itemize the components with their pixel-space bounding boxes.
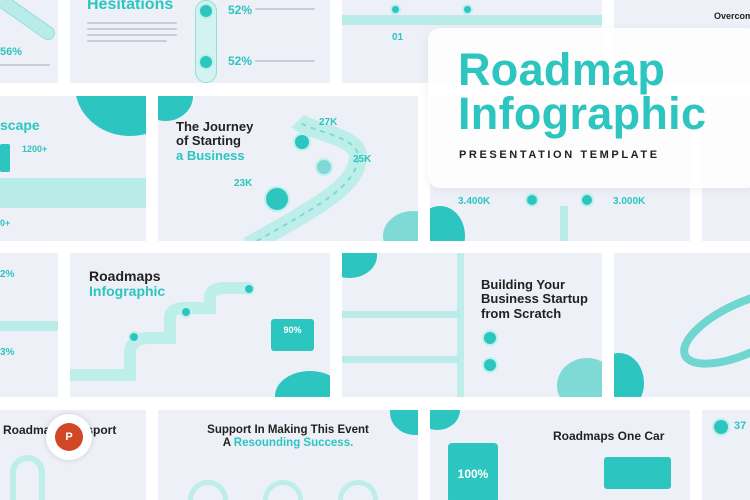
slide: journey: 25K: [353, 154, 371, 165]
slide: row1 col1: [0, 0, 58, 83]
slide: row1 col3: [342, 0, 602, 83]
slide: row4 col4: 37: [734, 420, 746, 432]
slide: hesitations: 52%: [228, 54, 252, 68]
slide: journey: [158, 96, 418, 241]
slide: row3 col1: 2%: [0, 269, 14, 280]
slide: hesitations: [70, 0, 330, 83]
slide: row1 col1: 56%: [0, 46, 22, 58]
slide: roadmaps one car: 100%: [458, 467, 488, 481]
slide: journey: 27K: [319, 117, 337, 128]
slide: support event: [158, 410, 418, 500]
slide: row3 col1: 3%: [0, 347, 14, 358]
slide: row2 col3 (behind title): 3.000K: [613, 196, 645, 207]
slide: transport: [0, 410, 146, 500]
slide: roadmaps infographic: 90%: [283, 325, 302, 335]
slide: landscape: [0, 96, 146, 241]
slide: building startup: from Scratch: [481, 306, 561, 321]
slide: building startup: [342, 253, 602, 397]
title card: [428, 28, 750, 188]
slide: support event: Support In Making This Event: [207, 424, 369, 436]
slide: roadmaps one car: Roadmaps One Car: [553, 429, 664, 443]
slide: row1 col3: 01: [392, 32, 403, 43]
heading: [458, 44, 706, 139]
slide: roadmaps one car: [430, 410, 690, 500]
slide: landscape: 1200+: [22, 144, 47, 154]
slide: transport: Roadmap Transport: [3, 423, 116, 437]
slide: row3 col4: [614, 253, 750, 397]
slide: building startup: Business Startup: [481, 291, 588, 306]
slide: journey: of Starting: [176, 133, 241, 148]
slide: row1 col4: [614, 0, 750, 83]
subtitle: PRESENTATION TEMPLATE: [459, 149, 660, 161]
slide: landscape: 0+: [0, 218, 10, 228]
slide: roadmaps infographic: Infographic: [89, 283, 165, 299]
slide: row2 col3 (behind title): 3.400K: [458, 196, 490, 207]
slide: row2 col3 (behind title): [430, 96, 690, 241]
slide: hesitations: 52%: [228, 3, 252, 17]
slide: journey: a Business: [176, 148, 245, 163]
slide: journey: 23K: [234, 178, 252, 189]
icon: powerpoint logo: [46, 414, 92, 460]
slide: landscape: scape: [0, 117, 40, 133]
heading: Infographic: [458, 88, 706, 139]
icon: powerpoint logo: P: [65, 431, 73, 443]
slide: row3 col1: [0, 253, 58, 397]
slide: journey: The Journey: [176, 119, 253, 134]
slide: row2 col4: [702, 96, 750, 241]
slide: roadmaps infographic: [70, 253, 330, 397]
slide: row4 col4: [702, 410, 750, 500]
slide: support event: A Resounding Success.: [223, 437, 353, 449]
heading: Roadmap: [458, 44, 665, 95]
slide: roadmaps infographic: Roadmaps: [89, 268, 161, 284]
slide: building startup: Building Your: [481, 277, 565, 292]
